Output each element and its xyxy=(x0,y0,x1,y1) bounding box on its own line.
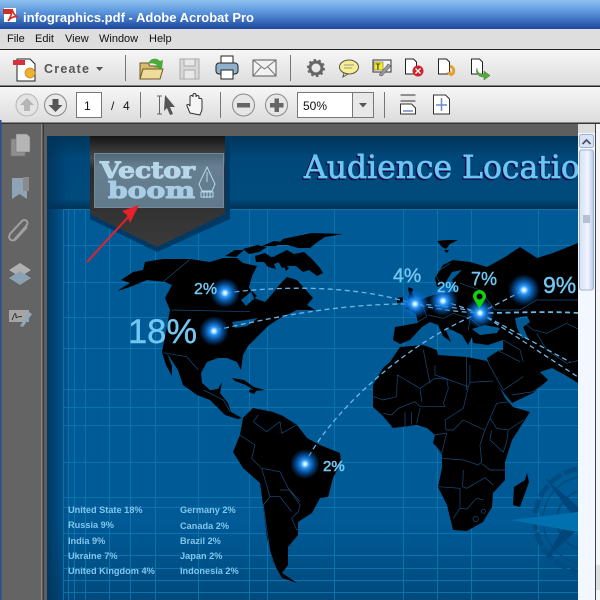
north america xyxy=(117,258,315,419)
percentage labels xyxy=(128,265,576,475)
europe islands xyxy=(397,240,458,303)
icon: save disk xyxy=(180,59,199,79)
panel: infographic page background xyxy=(47,136,578,600)
legend: countries: Russia 9% xyxy=(68,520,114,530)
scroll up button xyxy=(580,134,594,148)
menu bar: Edit xyxy=(35,33,54,45)
page number: 1 xyxy=(84,99,91,113)
main toolbar xyxy=(0,49,600,86)
page number: / xyxy=(111,99,115,113)
percentage labels: 2% xyxy=(437,279,459,296)
icon: zoom in xyxy=(266,94,288,116)
icon: select cursor xyxy=(157,95,175,115)
icon: next page xyxy=(44,94,66,116)
eurasia xyxy=(393,243,578,403)
world map xyxy=(117,233,600,583)
caribbean islands xyxy=(232,378,265,394)
icon: comment bubble xyxy=(340,60,358,77)
percentage labels: 18% xyxy=(128,313,197,351)
africa borders xyxy=(373,365,540,522)
percentage labels: 2% xyxy=(323,458,345,475)
ribbon shadow xyxy=(90,136,230,252)
icon: create document xyxy=(13,59,35,81)
zoom level box xyxy=(298,92,374,118)
icon: zoom out xyxy=(232,94,254,116)
menu bar xyxy=(0,29,600,49)
icon: gear xyxy=(308,60,324,76)
arctic islands xyxy=(225,233,343,276)
icon: document export xyxy=(472,59,490,80)
window title: infographics.pdf - Adobe Acrobat Pro xyxy=(23,10,254,25)
legend: countries: Brazil 2% xyxy=(180,536,221,546)
icon: pen nib xyxy=(199,167,215,198)
menu bar: Help xyxy=(149,33,172,45)
legend: countries: United State 18% xyxy=(68,505,143,515)
icon: hand xyxy=(187,94,202,115)
zoom level box: 50% xyxy=(303,99,327,113)
title xyxy=(302,154,578,180)
south america xyxy=(233,408,341,583)
icon: open folder xyxy=(140,59,163,79)
red arrow xyxy=(87,205,139,262)
north america borders xyxy=(163,259,250,412)
page dark edge xyxy=(47,136,600,600)
navigation toolbar xyxy=(0,86,600,124)
icon: document delete xyxy=(406,59,424,76)
legend: countries: Ukraine 7% xyxy=(68,551,118,561)
connection arcs xyxy=(216,288,578,464)
icon: fit page xyxy=(434,95,450,114)
title: Audience Location xyxy=(302,150,598,188)
ribbon logo xyxy=(90,136,230,252)
percentage labels: 7% xyxy=(471,269,497,289)
icon: bookmark xyxy=(12,177,29,199)
legend: countries: Indonesia 2% xyxy=(180,566,239,576)
legend: countries: United Kingdom 4% xyxy=(68,566,155,576)
ribbon logo: boom xyxy=(108,178,195,204)
icon: highlight pen xyxy=(373,60,391,76)
icon: printer xyxy=(216,56,238,79)
page number: 4 xyxy=(123,99,130,113)
menu bar: File xyxy=(7,33,25,45)
icon: previous page xyxy=(16,94,38,116)
icon: document rotate xyxy=(438,59,454,76)
icon: paperclip xyxy=(9,220,27,240)
icon: green map pin xyxy=(473,290,486,309)
ribbon body xyxy=(90,136,225,247)
icon: envelope xyxy=(253,60,276,76)
legend: countries: Canada 2% xyxy=(180,521,229,531)
madagascar xyxy=(513,473,529,507)
icon: pdf document xyxy=(3,8,18,22)
percentage labels: 9% xyxy=(543,272,576,298)
location markers xyxy=(199,274,540,479)
south america borders xyxy=(240,415,305,575)
icon: fit width xyxy=(400,95,416,114)
scroll thumb xyxy=(580,150,594,290)
legend: countries: Japan 2% xyxy=(180,551,222,561)
create label: Create xyxy=(44,62,89,76)
legend: countries: Germany 2% xyxy=(180,505,236,515)
menu bar: View xyxy=(65,33,89,45)
legend: countries: India 9% xyxy=(68,536,105,546)
icon: signature xyxy=(9,310,32,327)
percentage labels: 4% xyxy=(393,265,421,287)
left navigation panel xyxy=(0,120,44,600)
legend: countries xyxy=(68,505,239,576)
logo plate xyxy=(94,154,224,208)
eurasia borders xyxy=(418,263,580,390)
menu bar: Window xyxy=(99,33,138,45)
viewer background xyxy=(0,124,600,600)
percentage labels: 2% xyxy=(194,281,217,298)
icon: pages xyxy=(11,134,30,156)
scrollbar xyxy=(578,124,600,600)
compass rose xyxy=(511,466,578,569)
page number xyxy=(76,92,130,118)
africa xyxy=(373,345,530,531)
icon: layers xyxy=(9,263,31,285)
logo wordmark: Vector xyxy=(99,158,195,184)
title: Audience Location xyxy=(303,148,600,186)
title bar xyxy=(0,0,600,29)
icon: highlight pen: T xyxy=(376,62,380,72)
